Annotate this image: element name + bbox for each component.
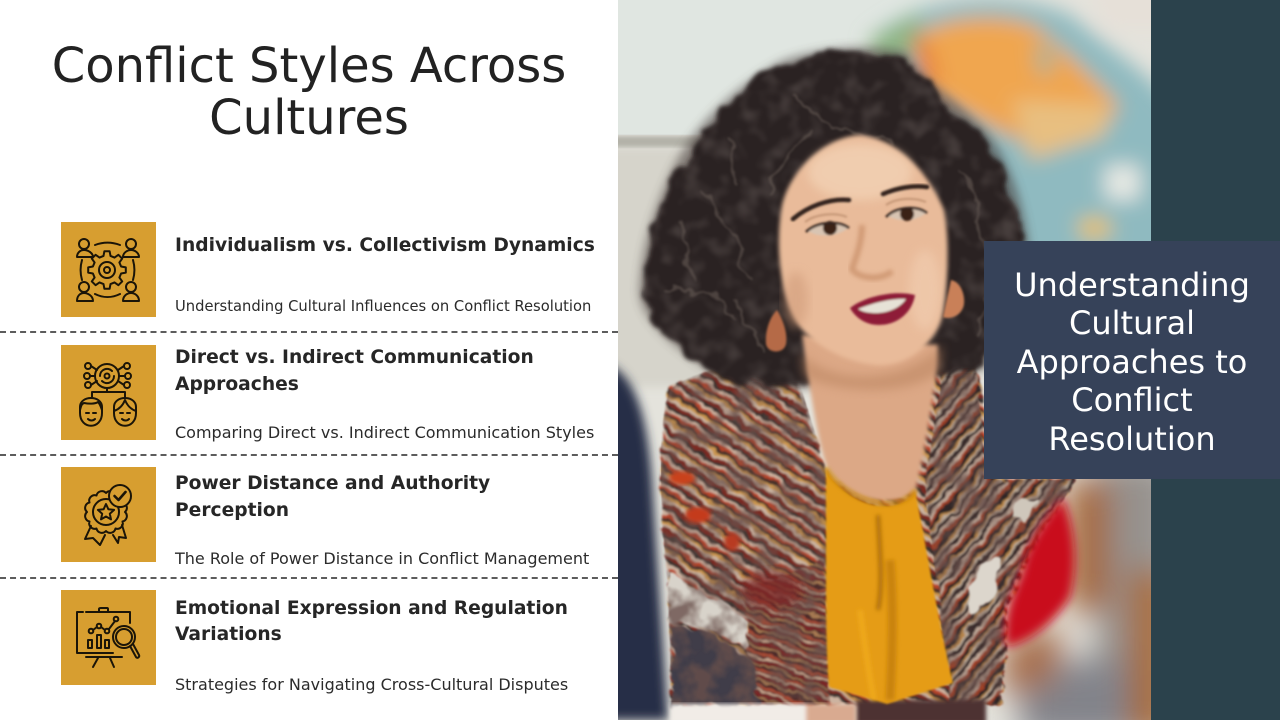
heading: item 2: Direct vs. Indirect Communication: [175, 347, 534, 368]
cardigan dark mottling: [661, 360, 1076, 705]
dark figure at left: [618, 360, 672, 720]
callout panel: Approaches to: [1017, 343, 1247, 381]
heading: item 4: [175, 598, 568, 645]
hair: [643, 51, 1025, 389]
title: Conflict Styles Across: [52, 38, 566, 94]
orange blouse: [826, 467, 953, 704]
heading: item 2: Approaches: [175, 374, 299, 394]
heading: item 4: Variations: [175, 624, 282, 645]
heading: item 3: [175, 473, 490, 520]
forehead highlight: [808, 144, 912, 200]
lower face shadow at left: [784, 272, 808, 328]
callout panel: Resolution: [1048, 420, 1216, 458]
text: item 4: Strategies for Navigating Cross-Cultural Disputes: [175, 674, 568, 694]
heading: item 1: Individualism vs. Collectivism Dynamics: [175, 235, 595, 256]
callout panel: Cultural: [1069, 304, 1195, 342]
icon: presentation board with magnifier: [61, 590, 156, 685]
text: item 3: The Role of Power Distance in Conflict Management: [175, 549, 589, 568]
eyes: [805, 199, 927, 236]
nose shading: [852, 225, 892, 278]
title: [52, 38, 566, 146]
side rail: [1151, 0, 1280, 720]
cardigan patches: [669, 471, 1038, 720]
blouse folds: [826, 468, 916, 700]
callout panel: Conflict: [1071, 381, 1193, 419]
heading: item 3: Power Distance and Authority: [175, 473, 490, 494]
text: item 2: Comparing Direct vs. Indirect Communication Styles: [175, 423, 594, 442]
cardigan: [661, 360, 1078, 705]
hair light mottling: [643, 51, 1025, 389]
red garment blur: [1005, 497, 1075, 647]
title: Cultures: [209, 90, 409, 146]
text: item 1: Understanding Cultural Influences on Conflict Resolution: [175, 298, 591, 315]
hair halo: [640, 47, 1029, 389]
earrings: [766, 280, 964, 352]
heading: item 3: Perception: [175, 500, 289, 520]
heading: item 4: Emotional Expression and Regulation: [175, 598, 568, 618]
hair highlights: [665, 95, 991, 350]
neck shadow: [800, 345, 942, 390]
callout panel: Understanding: [1014, 266, 1250, 304]
background wall: [600, 0, 1151, 720]
cheek highlight: [909, 250, 941, 330]
photo: woman speaking in front of a globe: [618, 0, 1151, 720]
icon: award badge with check: [61, 467, 156, 562]
eyebrows: [793, 186, 927, 219]
heading: item 2: [175, 347, 534, 394]
blurred globe: [860, 0, 1151, 241]
neck and chest: [802, 335, 938, 501]
icon: people around gear: [61, 222, 156, 317]
blurred right foreground: [992, 479, 1151, 720]
callout panel: [984, 241, 1280, 479]
icon: communication hub and two faces: [61, 345, 156, 440]
lips and teeth: [850, 293, 915, 325]
white sleeve foreground: [670, 704, 856, 720]
face: [779, 135, 948, 365]
